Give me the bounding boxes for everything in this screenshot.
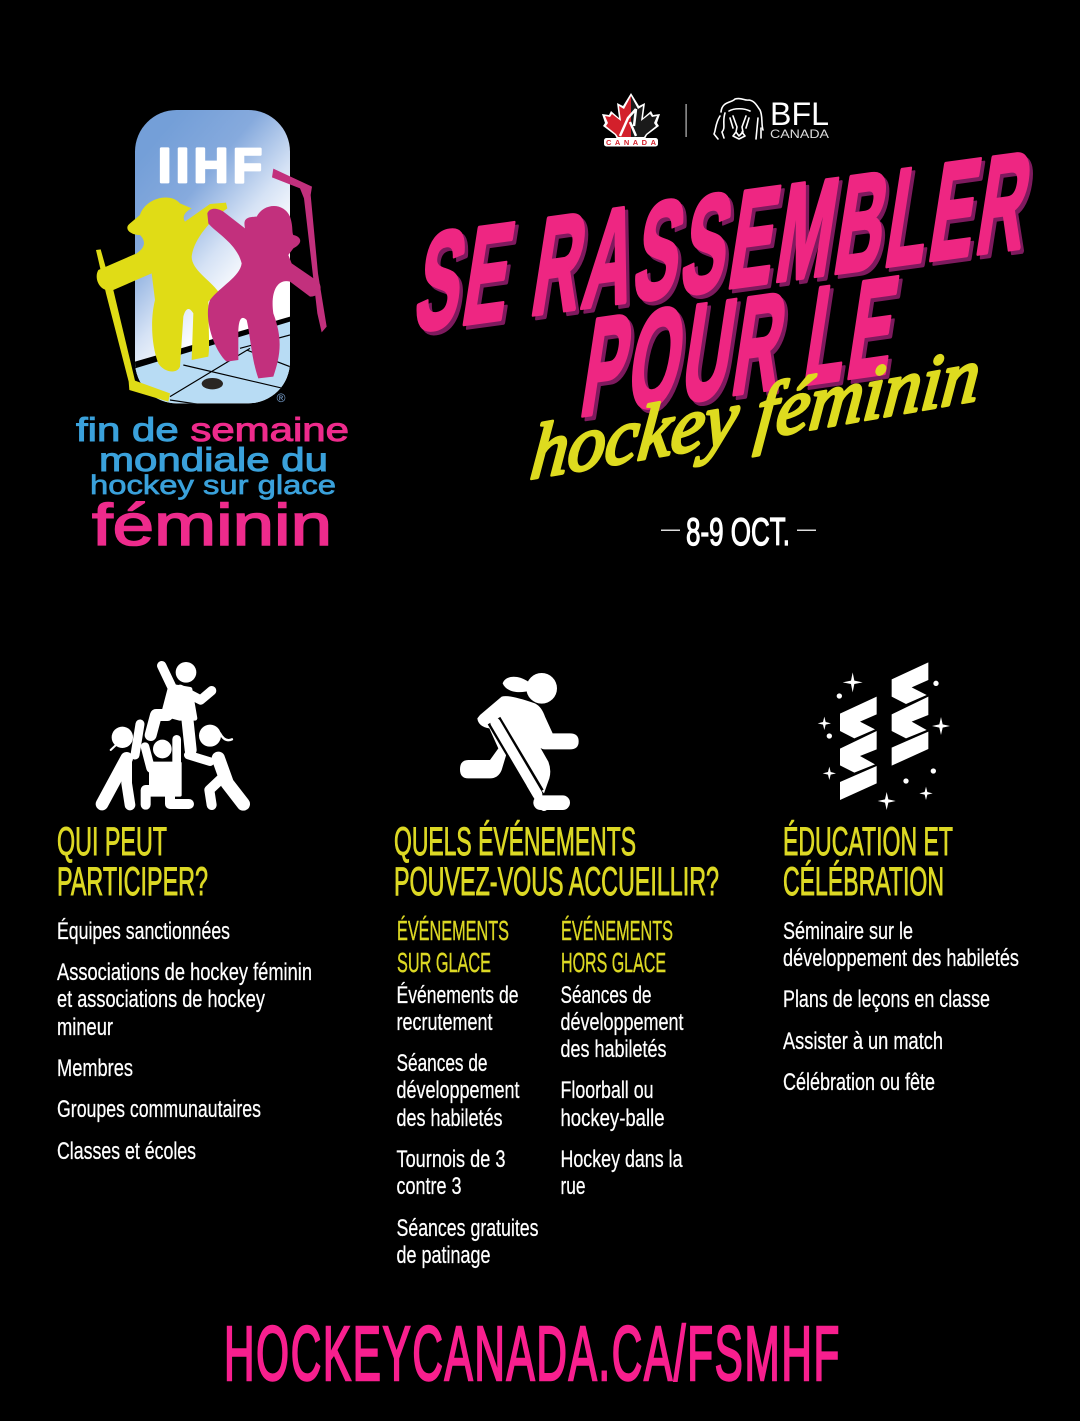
sub-column: hors glace: HORS GLACE (561, 947, 666, 978)
list: Équipes sanctionnées (57, 918, 230, 945)
heading: PARTICIPER? (57, 860, 208, 904)
heading: CÉLÉBRATION (783, 859, 944, 904)
sub-column: sur glace: Événements de (396, 982, 518, 1009)
sub-column: hors glace: rue (560, 1173, 586, 1200)
logo: BFL Canada: BFL (770, 96, 829, 132)
heading: ÉDUCATION ET (783, 819, 953, 864)
icon: hockey player (460, 673, 579, 807)
icon: IIHF rink emblem (96, 110, 327, 405)
date: 8-9 OCT. (686, 511, 790, 554)
sub-column: hors glace: Séances de (560, 982, 652, 1009)
title (407, 121, 1048, 450)
sub-column: hors glace: Hockey dans la (560, 1146, 683, 1173)
logo wordmark: féminin (92, 493, 332, 558)
heading: QUI PEUT (57, 820, 167, 864)
sub-column: sur glace (396, 915, 538, 1269)
list: Séminaire sur le (783, 918, 913, 945)
logo wordmark: hockey sur glace (90, 470, 336, 500)
list: et associations de hockey (57, 986, 266, 1013)
title script: hockey féminin: hockey féminin (527, 330, 984, 496)
sub-column: hors glace: Floorball ou (560, 1077, 654, 1104)
logo: Hockey Canada: CANADA (606, 138, 657, 147)
divider (686, 104, 687, 137)
sub-column: sur glace: contre 3 (396, 1173, 462, 1200)
sub-column: hors glace: ÉVÉNEMENTS (561, 915, 673, 946)
icon: lion (714, 98, 763, 139)
sub-column: sur glace: Séances de (396, 1050, 488, 1077)
sub-column: sur glace: SUR GLACE (397, 947, 491, 978)
list (57, 918, 312, 1165)
list: Groupes communautaires (57, 1096, 261, 1123)
sub-column: hors glace (560, 915, 684, 1200)
list (783, 918, 1019, 1096)
sub-column: sur glace: ÉVÉNEMENTS (397, 915, 509, 946)
sub-column: hors glace: hockey-balle (560, 1105, 664, 1132)
heading (783, 819, 953, 904)
sub-column: hors glace: des habiletés (560, 1036, 666, 1063)
logo: BFL Canada (714, 96, 829, 141)
heading: QUELS ÉVÉNEMENTS (394, 819, 636, 864)
list: Plans de leçons en classe (783, 986, 990, 1013)
sub-column: hors glace: développement (560, 1009, 684, 1036)
list: Célébration ou fête (783, 1069, 935, 1096)
logo wordmark (76, 411, 349, 558)
sub-column: sur glace: Séances gratuites (396, 1215, 538, 1242)
logo: IIHF women's weekend (76, 110, 349, 558)
sub-column: sur glace: Tournois de 3 (396, 1146, 506, 1173)
sub-column: sur glace: de patinage (396, 1242, 490, 1269)
heading (394, 819, 719, 904)
list: mineur (57, 1014, 113, 1041)
heading (57, 820, 208, 904)
list: Associations de hockey féminin (57, 959, 312, 986)
sub-column: sur glace: développement (396, 1077, 520, 1104)
logo: BFL Canada: CANADA (770, 129, 829, 141)
icon: ribbons and stars (818, 662, 950, 810)
list: Classes et écoles (57, 1138, 196, 1165)
logo: Hockey Canada (602, 93, 660, 147)
heading: POUVEZ-VOUS ACCUEILLIR? (394, 860, 719, 904)
column: éducation et célébration (783, 819, 1019, 1096)
logo wordmark: fin de semaine (76, 411, 349, 448)
column: qui peut participer (57, 820, 312, 1165)
sub-column: sur glace: recrutement (396, 1009, 493, 1036)
icon: IIHF rink emblem: IIHF (158, 139, 267, 193)
sub-column: sur glace: des habiletés (396, 1105, 502, 1132)
column: quels événements (394, 819, 719, 1269)
icon: people pyramid (102, 662, 243, 805)
list: Assister à un match (783, 1028, 943, 1055)
title line: POUR LE (573, 246, 914, 450)
icon: IIHF rink emblem: ® (277, 391, 286, 405)
list: Membres (57, 1055, 133, 1082)
logo wordmark: mondiale du (99, 441, 328, 478)
